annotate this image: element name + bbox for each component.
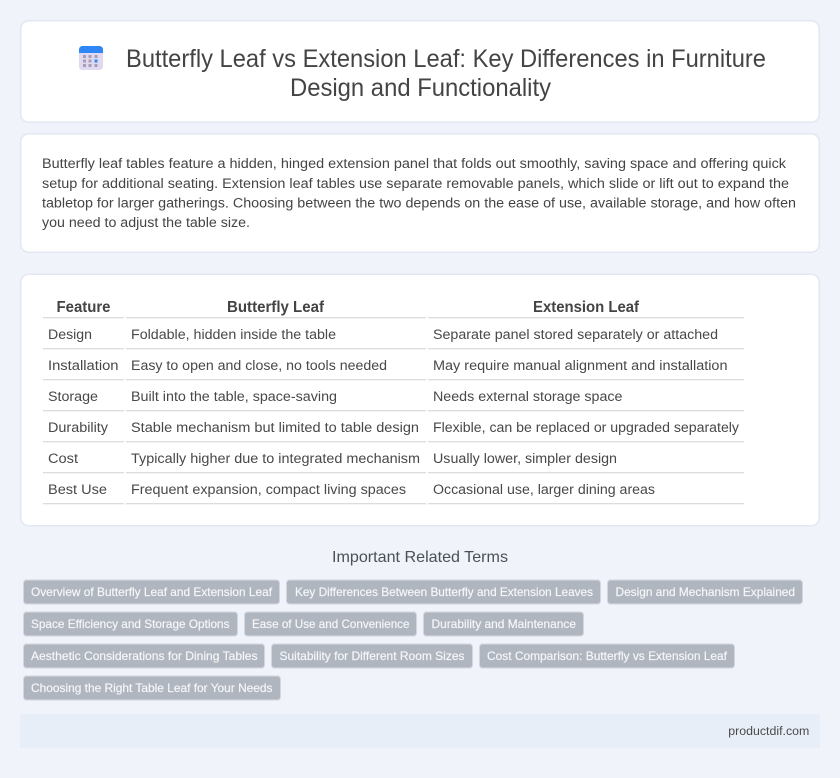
table header: Feature	[56, 299, 111, 316]
panel: header	[21, 21, 819, 122]
row: installation: Installation	[48, 358, 118, 374]
intro text: Butterfly leaf tables feature a hidden, hinged extension panel that folds out smoothly, saving space and offering quick	[42, 156, 787, 172]
icon: calendar	[79, 46, 103, 70]
table header	[56, 299, 640, 316]
row: cost: Usually lower, simpler design	[433, 451, 617, 467]
panel: introduction	[21, 134, 819, 252]
row: cost	[48, 451, 617, 467]
table header: Extension Leaf	[533, 299, 640, 316]
tag	[424, 612, 584, 636]
row: best use: Occasional use, larger dining areas	[433, 482, 655, 498]
row: durability: Flexible, can be replaced or upgraded separately	[433, 420, 740, 436]
tag	[24, 644, 264, 668]
tag	[608, 580, 802, 604]
row: best use: Frequent expansion, compact living spaces	[131, 482, 406, 498]
tag	[24, 676, 280, 700]
heading: important related terms: Important Related Terms	[332, 549, 508, 566]
table header: Butterfly Leaf	[227, 299, 325, 316]
tag: Durability and Maintenance	[432, 617, 576, 631]
row: durability	[48, 420, 740, 436]
tag	[480, 644, 734, 668]
row: best use: Best Use	[48, 482, 107, 498]
row: durability: Durability	[48, 420, 109, 436]
tag: Overview of Butterfly Leaf and Extension Leaf	[31, 585, 273, 599]
intro text	[42, 156, 796, 231]
intro text: setup for additional seating. Extension leaf tables use separate removable panels, which slide or lift out to expand the	[42, 176, 789, 192]
tag	[24, 612, 238, 636]
tag: Cost Comparison: Butterfly vs Extension Leaf	[487, 649, 728, 663]
tag: Suitability for Different Room Sizes	[280, 649, 464, 663]
tag: Ease of Use and Convenience	[252, 617, 410, 631]
intro text: you need to adjust the table size.	[42, 215, 250, 231]
related term tags	[24, 580, 802, 700]
tag: Key Differences Between Butterfly and Extension Leaves	[295, 585, 593, 599]
footer credit: productdif.com	[728, 724, 809, 738]
row: cost: Cost	[48, 451, 78, 467]
footer	[20, 714, 820, 748]
title: Butterfly Leaf vs Extension Leaf: Key Differences in Furniture	[126, 46, 766, 73]
row: design	[48, 327, 718, 343]
row: installation	[48, 358, 728, 374]
tag	[24, 580, 280, 604]
title	[126, 46, 766, 102]
intro text: tabletop for larger gatherings. Choosing between the two depends on the ease of use, available storage, and how often	[42, 196, 796, 212]
tag	[244, 612, 416, 636]
tag: Space Efficiency and Storage Options	[31, 617, 230, 631]
row: design: Separate panel stored separately or attached	[433, 327, 718, 343]
tag: Choosing the Right Table Leaf for Your Needs	[31, 681, 272, 695]
row: storage: Built into the table, space-saving	[131, 389, 337, 405]
title: Design and Functionality	[290, 75, 552, 102]
row: durability: Stable mechanism but limited to table design	[131, 420, 419, 436]
row: cost: Typically higher due to integrated mechanism	[131, 451, 420, 467]
tag: Design and Mechanism Explained	[616, 585, 795, 599]
row: installation: Easy to open and close, no tools needed	[131, 358, 387, 374]
row: storage: Storage	[48, 389, 98, 405]
row: storage: Needs external storage space	[433, 389, 623, 405]
row: design: Foldable, hidden inside the table	[131, 327, 336, 343]
panel: comparison table	[21, 274, 819, 526]
row: installation: May require manual alignment and installation	[433, 358, 728, 374]
row: storage	[48, 389, 623, 405]
tag	[286, 580, 600, 604]
row: design: Design	[48, 327, 92, 343]
tag: Aesthetic Considerations for Dining Tables	[31, 649, 258, 663]
tag	[272, 644, 472, 668]
row: best use	[48, 482, 655, 498]
